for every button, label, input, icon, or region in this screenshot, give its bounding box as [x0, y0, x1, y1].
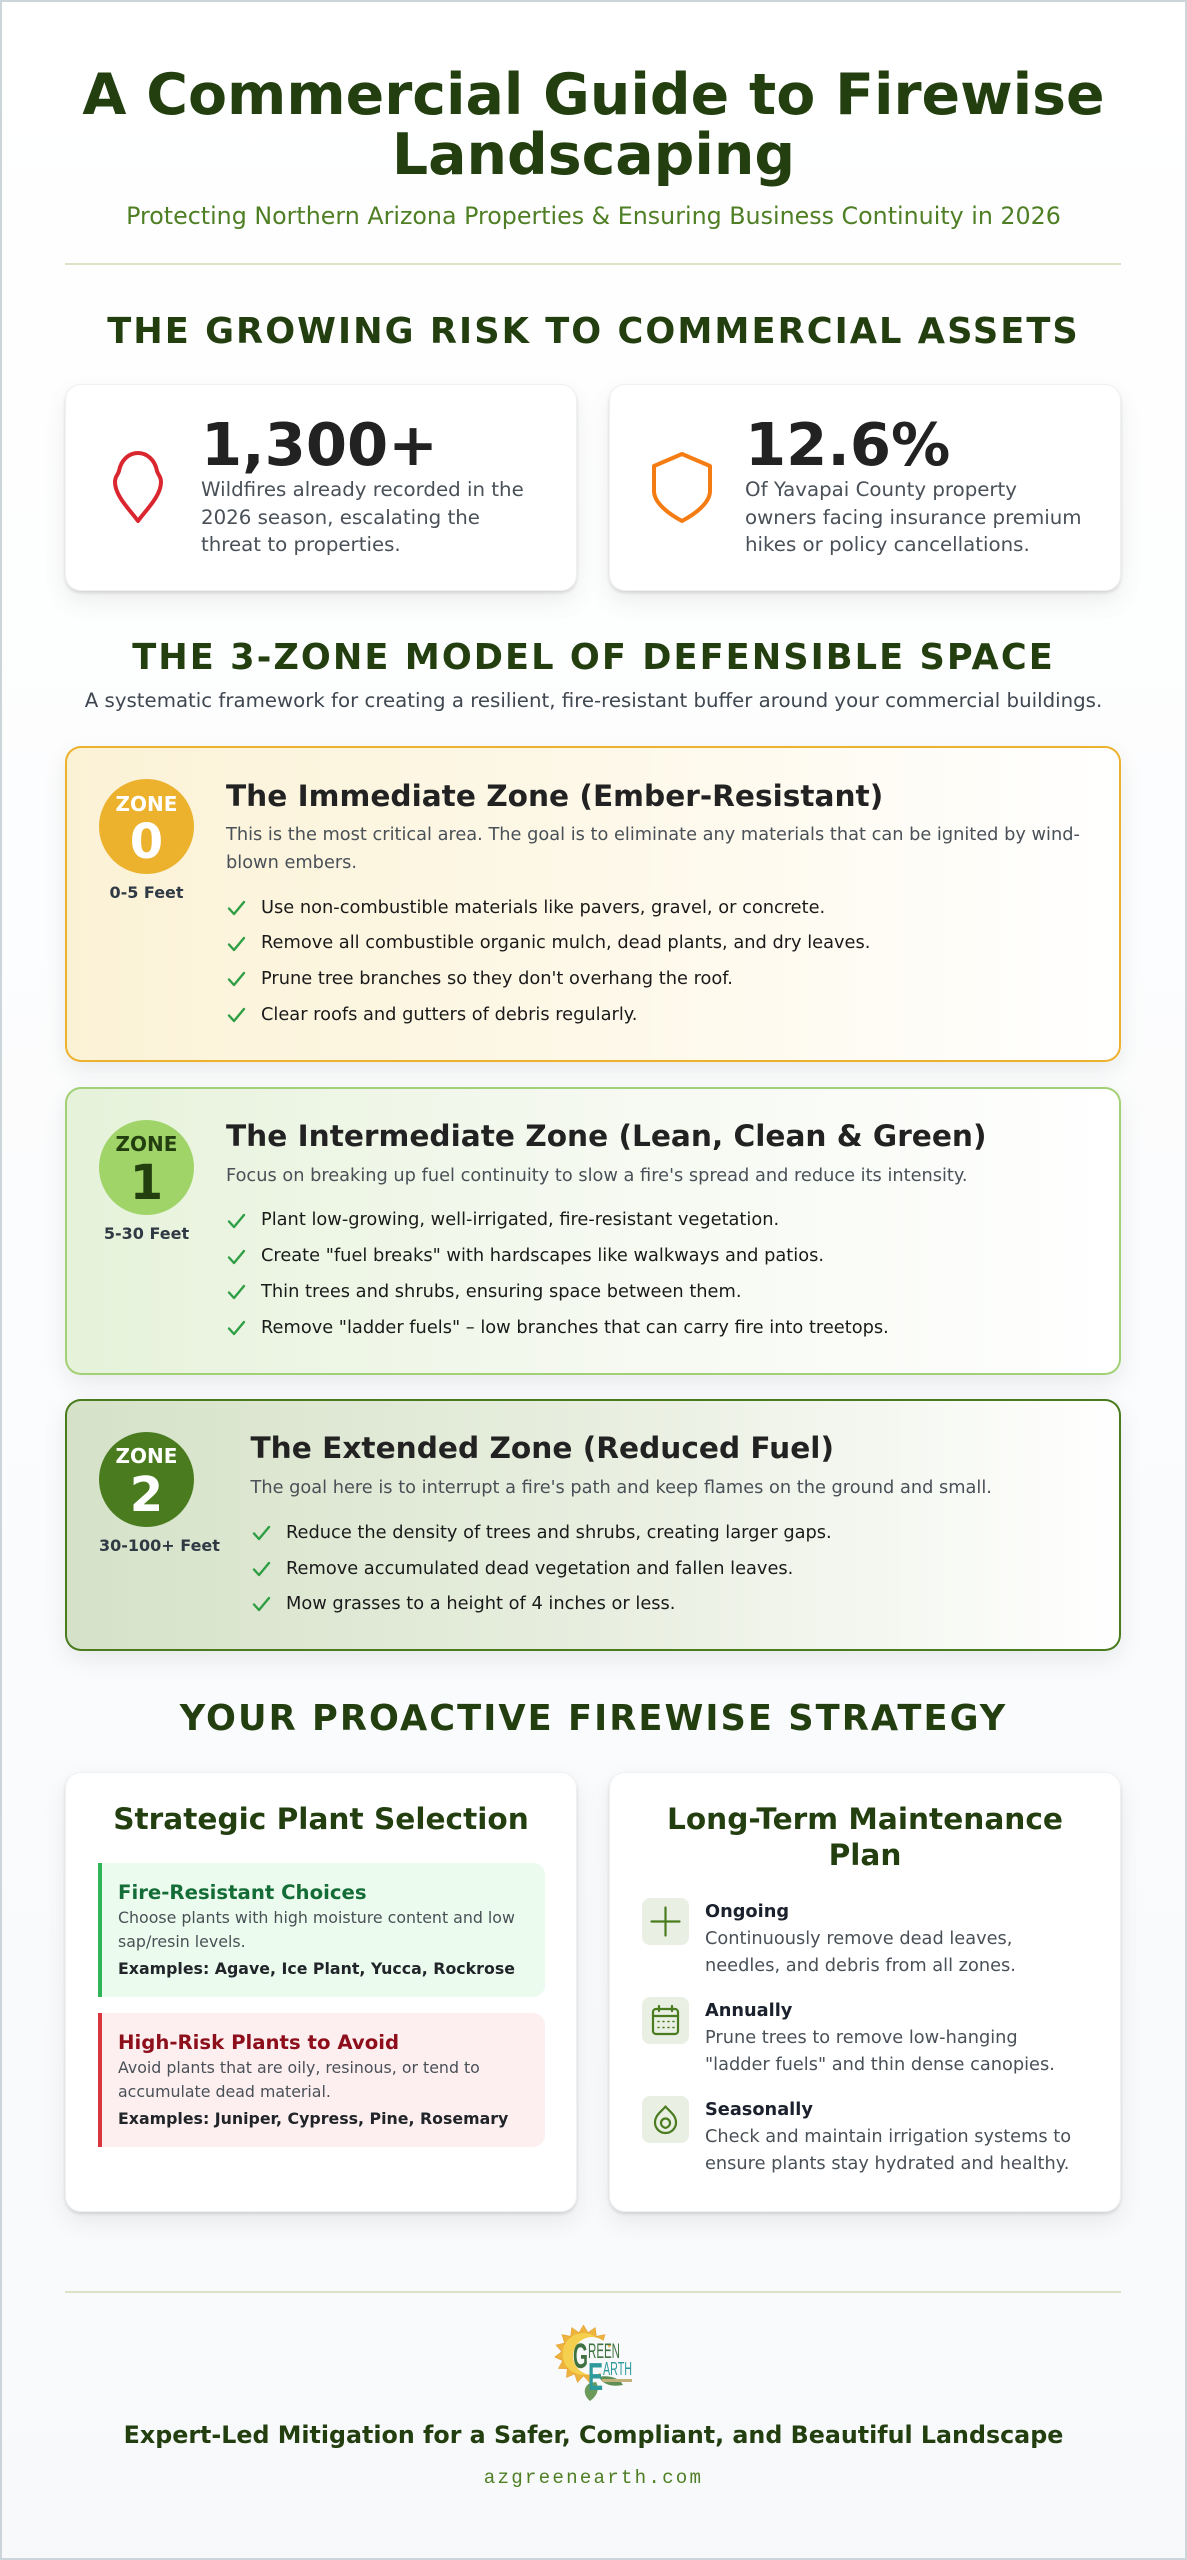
bullet: Plant low-growing, well-irrigated, fire-resistant vegetation.	[261, 1209, 779, 1230]
text: insurance description: owners facing insurance premium	[745, 506, 1082, 529]
logo: Green Earth	[554, 2325, 632, 2401]
text: high-risk description	[118, 2058, 480, 2101]
text: ongoing description	[705, 1928, 1016, 1976]
icon: check	[252, 1526, 270, 1540]
badge: zone 2: 2	[130, 1467, 163, 1523]
heading: 3-zone model: THE 3-ZONE MODEL OF DEFENSIBLE SPACE	[132, 636, 1055, 678]
label: zone 2 distance: 30-100+ Feet	[99, 1536, 220, 1555]
heading: seasonally: Seasonally	[705, 2100, 813, 2120]
heading: maintenance plan: Plan	[829, 1838, 901, 1872]
heading: firewise strategy: YOUR PROACTIVE FIREWISE STRATEGY	[180, 1698, 1007, 1739]
heading: ongoing: Ongoing	[705, 1902, 789, 1922]
icon: calendar	[642, 1997, 689, 2044]
text: annually description: "ladder fuels" and thin dense canopies.	[705, 2055, 1055, 2075]
tagline: Expert-Led Mitigation for a Safer, Compliant, and Beautiful Landscape	[124, 2421, 1063, 2449]
panel: strategic plant selection	[65, 1772, 577, 2212]
text: zone 2 description: The goal here is to interrupt a fire's path and keep flames on the ground and small.	[250, 1478, 992, 1498]
icon: check	[228, 1214, 246, 1228]
bullet: Remove "ladder fuels" – low branches that can carry fire into treetops.	[261, 1316, 889, 1338]
text: fire-resistant description	[118, 1908, 515, 1951]
icon: check	[228, 1250, 246, 1264]
panel: long-term maintenance plan	[609, 1772, 1121, 2212]
icon: check	[228, 1284, 246, 1300]
badge: zone 0: ZONE	[116, 792, 177, 816]
text: framework intro: A systematic framework for creating a resilient, fire-resistant buffer around your commercial buildings.	[85, 689, 1102, 712]
icon: water drop	[642, 2096, 689, 2143]
label: zone 1 distance: 5-30 Feet	[104, 1224, 189, 1243]
text: ongoing description: needles, and debris from all zones.	[705, 1956, 1016, 1976]
panel: wildfire statistic	[65, 384, 577, 591]
text: fire-resistant examples: Examples: Agave, Ice Plant, Yucca, Rockrose	[118, 1959, 515, 1978]
text: zone 0 description: This is the most critical area. The goal is to eliminate any materials that can be ignited by wind-	[226, 825, 1080, 845]
badge: zone 1	[99, 1120, 194, 1215]
heading: maintenance plan: Long-Term Maintenance	[667, 1802, 1063, 1836]
text: annually description: Prune trees to remove low-hanging	[705, 2028, 1018, 2048]
bullet: Prune tree branches so they don't overhang the roof.	[261, 968, 733, 988]
bullet: Clear roofs and gutters of debris regularly.	[261, 1004, 637, 1024]
text: zone 1 description: Focus on breaking up fuel continuity to slow a fire's spread and reduce its intensity.	[226, 1166, 968, 1186]
heading: high-risk: High-Risk Plants to Avoid	[118, 2031, 399, 2054]
label: zone 0 distance: 0-5 Feet	[109, 883, 184, 902]
text: seasonally description	[705, 2126, 1071, 2174]
text: wildfire description: Wildfires already recorded in the	[201, 478, 524, 501]
text: wildfire description: 2026 season, escalating the	[201, 506, 480, 529]
logo: Green Earth: E	[588, 2356, 603, 2399]
badge: zone 1: ZONE	[116, 1132, 177, 1156]
website: azgreenearth.com	[484, 2467, 703, 2489]
icon: flame	[113, 451, 163, 524]
heading: maintenance plan	[667, 1802, 1063, 1872]
bullet: Thin trees and shrubs, ensuring space between them.	[261, 1280, 741, 1302]
icon: check	[228, 900, 246, 916]
text: high-risk description: accumulate dead material.	[118, 2082, 331, 2101]
heading: annually: Annually	[705, 2000, 792, 2020]
title	[82, 62, 1105, 188]
panel: zone 2	[65, 1399, 1121, 1651]
callout: fire-resistant choices	[98, 1863, 545, 1997]
text: wildfire description: threat to properties.	[201, 533, 401, 556]
heading: growing risk: THE GROWING RISK TO COMMERCIAL ASSETS	[107, 310, 1080, 352]
text: high-risk examples: Examples: Juniper, Cypress, Pine, Rosemary	[118, 2109, 508, 2128]
icon: check	[228, 972, 246, 986]
callout: high-risk plants	[98, 2013, 545, 2147]
bullet: Remove accumulated dead vegetation and fallen leaves.	[286, 1558, 793, 1578]
heading: intermediate zone: The Intermediate Zone (Lean, Clean & Green)	[226, 1119, 987, 1153]
icon: check	[252, 1562, 270, 1576]
text: wildfire description	[201, 478, 524, 556]
badge: zone 0	[99, 779, 194, 874]
bullet: Use non-combustible materials like pavers, gravel, or concrete.	[261, 896, 825, 918]
title: Landscaping	[392, 122, 795, 188]
bullet: Remove all combustible organic mulch, dead plants, and dry leaves.	[261, 932, 870, 953]
text: insurance description: hikes or policy cancellations.	[745, 533, 1030, 556]
text: ongoing description: Continuously remove dead leaves,	[705, 1928, 1012, 1948]
panel: insurance statistic	[609, 384, 1121, 591]
icon: check	[228, 936, 246, 952]
heading: immediate zone: The Immediate Zone (Ember-Resistant)	[226, 779, 883, 813]
title: A Commercial Guide to Firewise	[82, 62, 1105, 128]
text: high-risk description: Avoid plants that are oily, resinous, or tend to	[118, 2058, 480, 2077]
number: wildfires: 1,300+	[201, 410, 438, 479]
text: fire-resistant description: sap/resin levels.	[118, 1932, 246, 1951]
text: fire-resistant description: Choose plants with high moisture content and low	[118, 1908, 515, 1927]
text: zone 0 description: blown embers.	[226, 853, 357, 873]
badge: zone 2: ZONE	[116, 1444, 177, 1468]
text: annually description	[705, 2028, 1055, 2075]
icon: check	[228, 1008, 246, 1022]
text: zone 0 description	[226, 825, 1080, 873]
icon: plus	[642, 1898, 689, 1945]
text: insurance description	[745, 478, 1082, 556]
badge: zone 2	[99, 1432, 194, 1527]
subtitle: Protecting Northern Arizona Properties & Ensuring Business Continuity in 2026	[126, 202, 1061, 230]
panel: zone 1	[65, 1087, 1121, 1375]
heading: extended zone: The Extended Zone (Reduced Fuel)	[250, 1431, 834, 1465]
bullet: Reduce the density of trees and shrubs, creating larger gaps.	[286, 1522, 832, 1542]
number: insurance: 12.6%	[745, 410, 950, 479]
heading: plant selection: Strategic Plant Selection	[113, 1802, 529, 1836]
bullet: Create "fuel breaks" with hardscapes like walkways and patios.	[261, 1245, 824, 1266]
badge: zone 0: 0	[130, 814, 163, 870]
logo: Green Earth: G	[573, 2337, 588, 2376]
icon: shield	[652, 452, 712, 523]
bullet: Mow grasses to a height of 4 inches or less.	[286, 1593, 675, 1614]
text: seasonally description: ensure plants stay hydrated and healthy.	[705, 2154, 1069, 2174]
badge: zone 1: 1	[130, 1155, 163, 1211]
text: seasonally description: Check and maintain irrigation systems to	[705, 2126, 1071, 2146]
text: insurance description: Of Yavapai County property	[745, 478, 1017, 501]
heading: fire-resistant: Fire-Resistant Choices	[118, 1881, 367, 1904]
icon: check	[252, 1596, 270, 1612]
icon: check	[228, 1320, 246, 1336]
panel: zone 0	[65, 746, 1121, 1062]
